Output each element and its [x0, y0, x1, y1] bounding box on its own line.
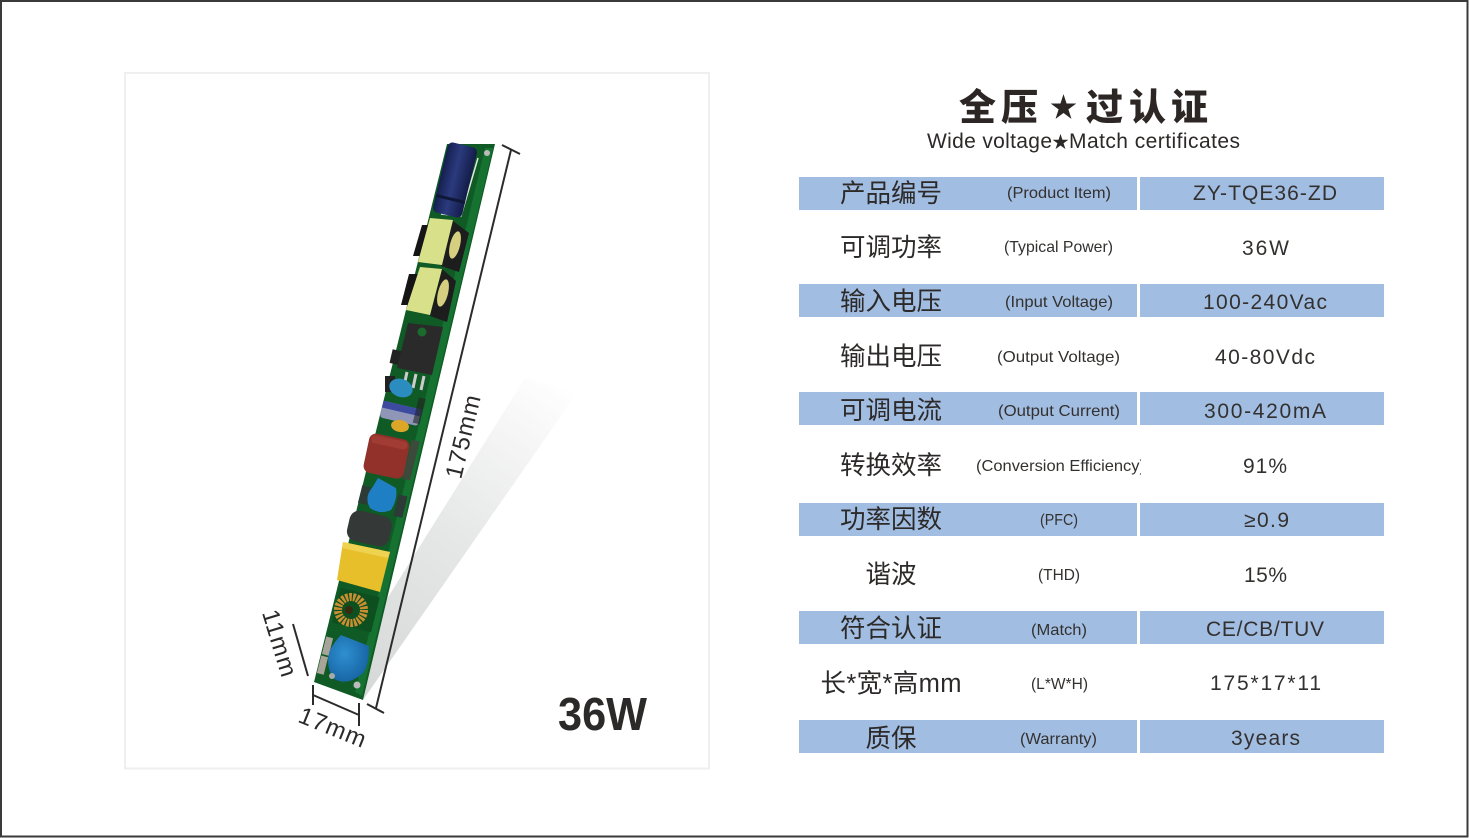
dimension: 17mm: 17mm	[295, 702, 371, 754]
title: 过认证	[1086, 87, 1208, 128]
title: 全压	[959, 87, 1038, 128]
row: match: CE/CB/TUV	[1206, 618, 1324, 641]
wattage label: 36W	[558, 688, 648, 740]
row: input voltage: (Input Voltage)	[1005, 294, 1113, 311]
row: conversion efficiency: 转换效率	[840, 452, 942, 480]
circuit board	[314, 141, 495, 700]
subtitle	[927, 130, 1240, 153]
row: output current: 可调电流	[840, 397, 942, 425]
red capacitor	[362, 432, 411, 480]
row: input voltage: 100-240Vac	[1203, 291, 1327, 314]
dimension: 175mm: 175mm	[441, 391, 487, 481]
fuses	[317, 637, 333, 675]
row: conversion efficiency: 91%	[1243, 455, 1287, 478]
subtitle: Wide voltage	[927, 130, 1052, 153]
dimension: 11mm: 11mm	[256, 607, 302, 681]
row: product item: (Product Item)	[1007, 185, 1111, 202]
transformer 1	[413, 218, 469, 272]
small electrolytic capacitor	[380, 401, 422, 426]
row: typical power: 36W	[1242, 237, 1289, 260]
title: ★	[1050, 93, 1077, 123]
dimension: 175mm	[367, 145, 520, 713]
subtitle: Match certificates	[1069, 130, 1240, 153]
subtitle: ★	[1052, 133, 1069, 152]
blue ceramic capacitor	[385, 375, 415, 401]
row: THD: 谐波	[865, 561, 917, 589]
row: output current	[799, 392, 1384, 425]
electrolytic capacitor	[432, 141, 478, 219]
row: dimensions	[820, 670, 1321, 698]
row: match: (Match)	[1031, 622, 1087, 639]
row: output voltage	[840, 343, 1315, 371]
row: typical power: 可调功率	[840, 234, 942, 262]
power transistor	[390, 323, 443, 390]
panel: product photo	[125, 73, 709, 768]
row: output voltage: (Output Voltage)	[997, 349, 1120, 366]
row: typical power	[840, 234, 1289, 262]
row: dimensions: (L*W*H)	[1031, 676, 1088, 693]
row: dimensions: 175*17*11	[1210, 672, 1321, 695]
row: product item: 产品编号	[840, 180, 942, 208]
row: match	[799, 611, 1384, 644]
row: conversion efficiency: (Conversion Efficiency)	[976, 458, 1145, 475]
row: PFC	[799, 503, 1384, 536]
row: PFC: ≥0.9	[1244, 509, 1289, 532]
row: PFC: (PFC)	[1040, 512, 1078, 529]
row: typical power: (Typical Power)	[1004, 239, 1113, 256]
row: THD	[865, 561, 1287, 589]
transformer 2	[401, 267, 456, 322]
row: PFC: 功率因数	[840, 506, 942, 534]
row: match: 符合认证	[840, 615, 942, 643]
row: output voltage: 输出电压	[840, 343, 942, 371]
row: dimensions: 长*宽*高mm	[820, 670, 962, 698]
toroid coil	[332, 588, 380, 632]
row: warranty: (Warranty)	[1020, 731, 1097, 748]
row: THD: 15%	[1244, 564, 1287, 587]
black inductor	[345, 509, 394, 549]
row: output voltage: 40-80Vdc	[1215, 346, 1315, 369]
row: conversion efficiency	[841, 452, 1286, 476]
row: product item: ZY-TQE36-ZD	[1193, 182, 1337, 205]
yellow X capacitor	[337, 542, 390, 592]
small board parts	[413, 397, 426, 424]
row: output current: 300-420mA	[1204, 400, 1326, 423]
row: input voltage: 输入电压	[840, 288, 942, 316]
row: output current: (Output Current)	[998, 403, 1120, 420]
row: warranty: 3years	[1231, 727, 1300, 750]
row: input voltage	[799, 284, 1384, 317]
row: warranty: 质保	[865, 725, 917, 753]
product shadow	[363, 378, 577, 700]
yellow capacitor	[390, 419, 410, 433]
spec table	[799, 177, 1384, 753]
blue varistor large	[328, 635, 369, 682]
row: THD: (THD)	[1038, 567, 1080, 584]
blue varistor small	[358, 478, 408, 518]
row: product item	[799, 177, 1384, 210]
row: warranty	[799, 720, 1384, 753]
